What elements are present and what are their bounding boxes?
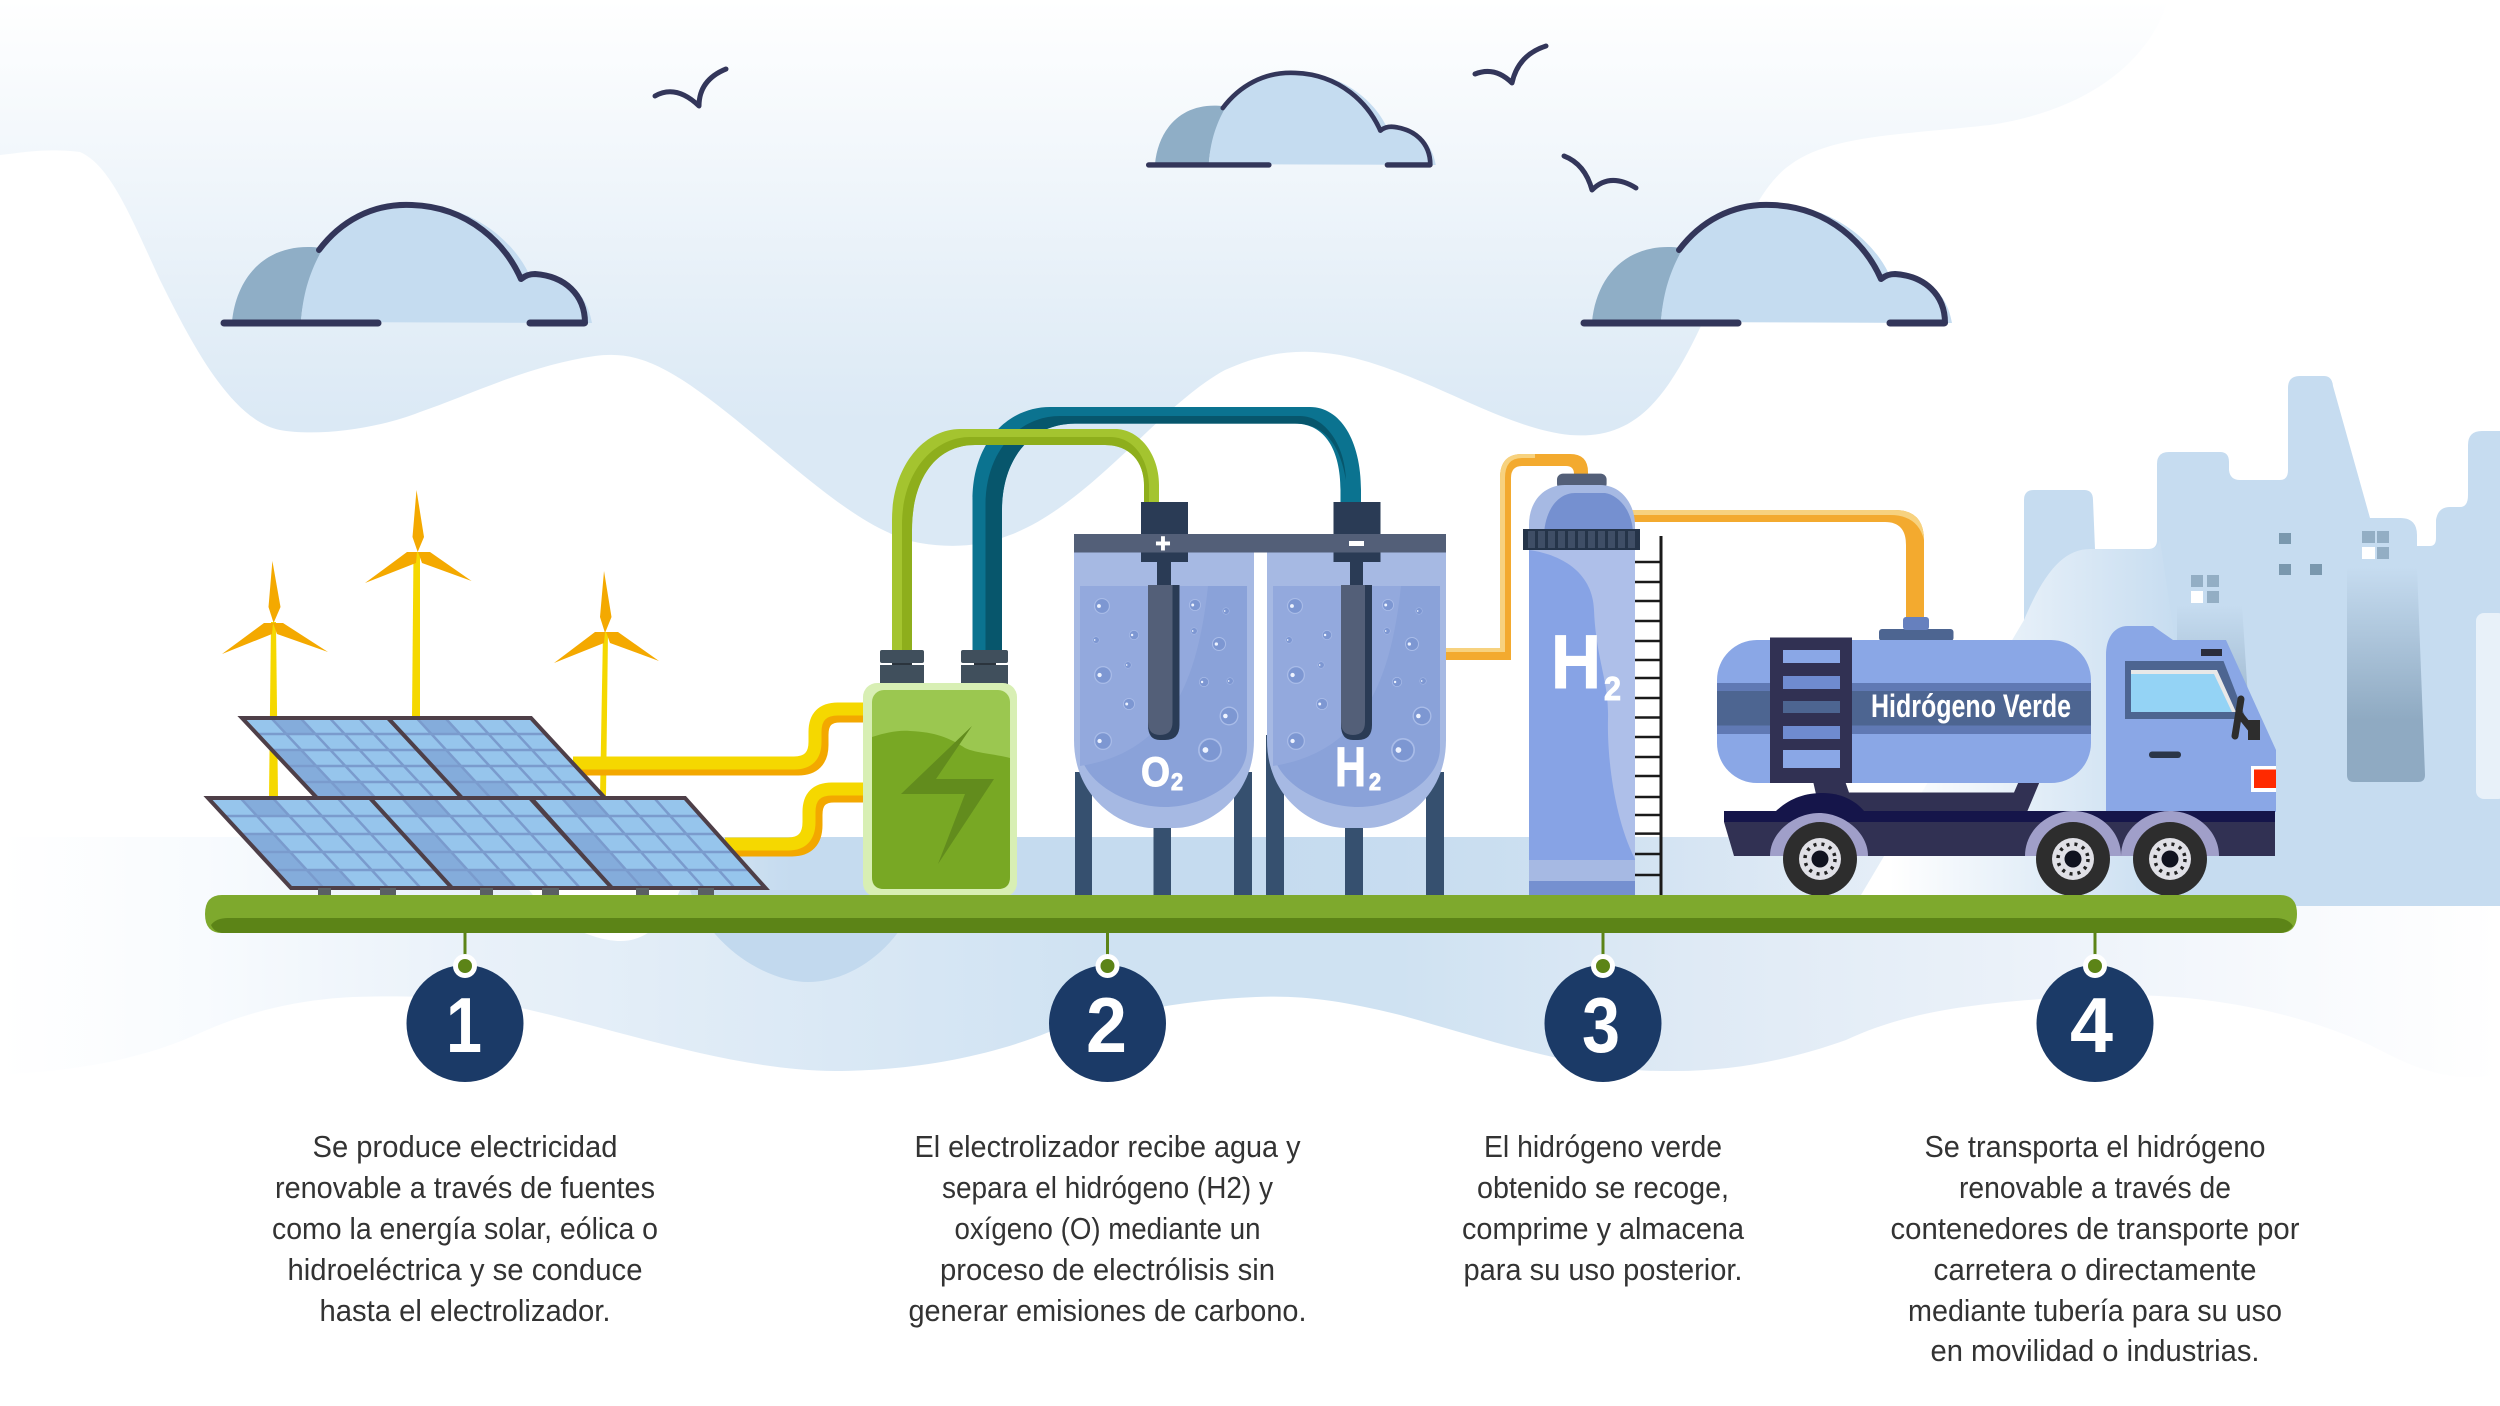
bubbles bbox=[1286, 598, 1432, 762]
connectors bbox=[880, 650, 1008, 685]
wheels bbox=[1783, 822, 2207, 896]
bubbles bbox=[1092, 598, 1238, 762]
hydrogen storage tank bbox=[1523, 474, 1640, 896]
cab bbox=[2106, 626, 2276, 812]
step 4 text: contenedores de transporte por bbox=[1890, 1211, 2300, 1246]
icon: lightning bolt bbox=[901, 726, 994, 864]
orange pipe vessel to tank bbox=[1446, 454, 1588, 660]
label H2: 2 bbox=[1369, 769, 1381, 796]
tanker bbox=[1717, 617, 2091, 783]
birds bbox=[655, 46, 1636, 190]
step 4 text: en movilidad o industrias. bbox=[1930, 1333, 2260, 1368]
green pipe bbox=[892, 429, 1159, 655]
truck bbox=[1717, 617, 2276, 896]
tanker label: Hidrógeno Verde bbox=[1871, 688, 2071, 724]
electrolyzer right vessel H2 bbox=[1266, 545, 1446, 896]
step 4 text: carretera o directamente bbox=[1934, 1252, 2256, 1287]
step 4 text: mediante tubería para su uso bbox=[1908, 1293, 2282, 1328]
step 3 text bbox=[1462, 1129, 1745, 1287]
step 1 text: como la energía solar, eólica o bbox=[272, 1211, 658, 1246]
step 4 badge bbox=[2036, 933, 2154, 1082]
yellow power cables bbox=[573, 709, 866, 847]
step 2 badge bbox=[1049, 933, 1166, 1082]
electrolyzer top bar with terminals bbox=[1074, 502, 1446, 562]
step 3 badge: 3 bbox=[1582, 981, 1620, 1069]
teal pipe bbox=[972, 407, 1361, 655]
step 1 badge: 1 bbox=[446, 981, 482, 1069]
step 2 text bbox=[908, 1129, 1306, 1328]
label H2: H bbox=[1551, 620, 1601, 705]
step 2 text: separa el hidrógeno (H2) y bbox=[942, 1170, 1273, 1205]
tank connector bbox=[1813, 781, 2040, 812]
step 1 text: hidroeléctrica y se conduce bbox=[288, 1252, 642, 1287]
electrolyzer power unit bbox=[863, 650, 1017, 897]
background: city silhouette bbox=[1855, 376, 2500, 906]
step 3 text: comprime y almacena bbox=[1462, 1211, 1745, 1246]
label O2: 2 bbox=[1171, 769, 1183, 796]
step 2 badge: 2 bbox=[1086, 981, 1127, 1069]
step 1 text: renovable a través de fuentes bbox=[275, 1170, 655, 1205]
step 3 text: para su uso posterior. bbox=[1464, 1252, 1742, 1287]
step 3 text: obtenido se recoge, bbox=[1477, 1170, 1729, 1205]
ground bar bbox=[205, 895, 2297, 933]
step 4 text: renovable a través de bbox=[1959, 1170, 2231, 1205]
label O2: O bbox=[1141, 748, 1170, 795]
chassis bbox=[1724, 793, 2275, 856]
city windows bbox=[2191, 531, 2389, 603]
step 2 text: El electrolizador recibe agua y bbox=[914, 1129, 1301, 1164]
step 1 text bbox=[272, 1129, 658, 1328]
electrolyzer left vessel O2 bbox=[1074, 545, 1254, 896]
background: sky with wavy lower edge bbox=[0, 0, 2168, 546]
label H2: H bbox=[1335, 735, 1366, 798]
collar bbox=[1523, 529, 1640, 550]
step 2 text: proceso de electrólisis sin bbox=[940, 1252, 1275, 1287]
electrode bbox=[1341, 560, 1372, 740]
step 2 text: oxígeno (O) mediante un bbox=[954, 1211, 1260, 1246]
step 1 text: Se produce electricidad bbox=[312, 1129, 618, 1164]
orange pipe tank to truck bbox=[1630, 510, 1924, 620]
cloud right bbox=[1584, 203, 1952, 323]
ladder beside storage tank bbox=[1635, 536, 1661, 896]
step 1 badge bbox=[406, 933, 524, 1082]
background: lower wavy band bbox=[0, 837, 2500, 1077]
step 4 badge: 4 bbox=[2070, 981, 2113, 1069]
electrolyzer top bar with terminals: + bbox=[1155, 528, 1171, 558]
step 1 text: hasta el electrolizador. bbox=[320, 1293, 610, 1328]
wind turbines bbox=[222, 490, 659, 797]
step 4 text: Se transporta el hidrógeno bbox=[1924, 1129, 2266, 1164]
electrode bbox=[1148, 560, 1180, 740]
solar panels bbox=[208, 718, 766, 896]
step 3 badge bbox=[1544, 933, 1662, 1082]
step 3 text: El hidrógeno verde bbox=[1484, 1129, 1722, 1164]
step 2 text: generar emisiones de carbono. bbox=[908, 1293, 1306, 1328]
step 4 text bbox=[1890, 1129, 2300, 1368]
cloud top center bbox=[1149, 71, 1436, 165]
label H2: 2 bbox=[1604, 670, 1621, 707]
cloud left bbox=[224, 203, 592, 323]
